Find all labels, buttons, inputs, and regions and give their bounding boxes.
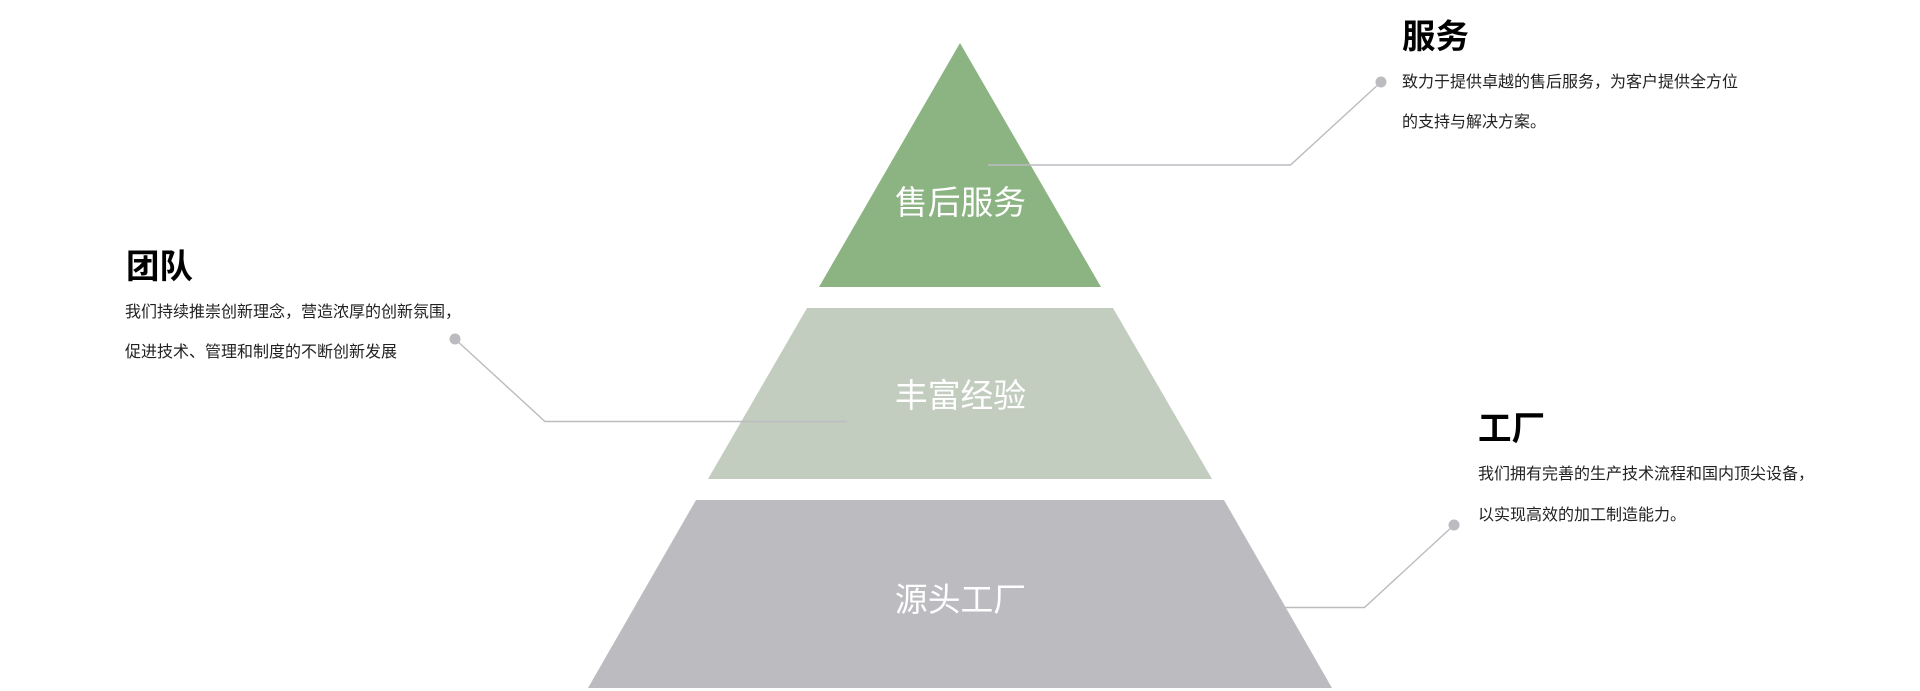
- text block: 团队 description: [125, 302, 461, 361]
- text block: 服务 description: [1402, 73, 1738, 131]
- text block: 工厂 description: 以实现高效的加工制造能力。: [1478, 506, 1686, 524]
- callout: 团队: [125, 249, 847, 422]
- pyramid tier: 源头工厂: 源头工厂: [895, 581, 1026, 618]
- heading: 工厂: 工厂: [1478, 411, 1545, 448]
- connector line: 工厂: [1285, 525, 1454, 608]
- connector dot: 工厂: [1448, 520, 1460, 530]
- pyramid tier: 售后服务: [819, 43, 1101, 287]
- pyramid tier: 丰富经验: [708, 308, 1212, 479]
- pyramid tier: 源头工厂: [588, 500, 1332, 688]
- text block: 团队 description: 促进技术、管理和制度的不断创新发展: [125, 343, 397, 361]
- pyramid tier: 售后服务: 售后服务: [895, 184, 1026, 221]
- text block: 服务 description: 的支持与解决方案。: [1402, 113, 1546, 131]
- text block: 工厂 description: [1478, 465, 1814, 524]
- connector line: 团队: [455, 339, 847, 422]
- callout: 服务: [988, 19, 1738, 165]
- pyramid tier: 丰富经验: 丰富经验: [895, 377, 1026, 414]
- text block: 工厂 description: 我们拥有完善的生产技术流程和国内顶尖设备，: [1478, 465, 1814, 483]
- connector dot: 团队: [450, 334, 460, 344]
- heading: 团队: 团队: [126, 249, 193, 286]
- text block: 服务 description: 致力于提供卓越的售后服务，为客户提供全方位: [1402, 73, 1738, 91]
- heading: 服务: 服务: [1402, 19, 1469, 56]
- connector dot: 服务: [1376, 76, 1386, 88]
- text block: 团队 description: 我们持续推崇创新理念，营造浓厚的创新氛围，: [125, 302, 461, 321]
- connector line: 服务: [988, 82, 1381, 165]
- callout: 工厂: [1285, 411, 1814, 608]
